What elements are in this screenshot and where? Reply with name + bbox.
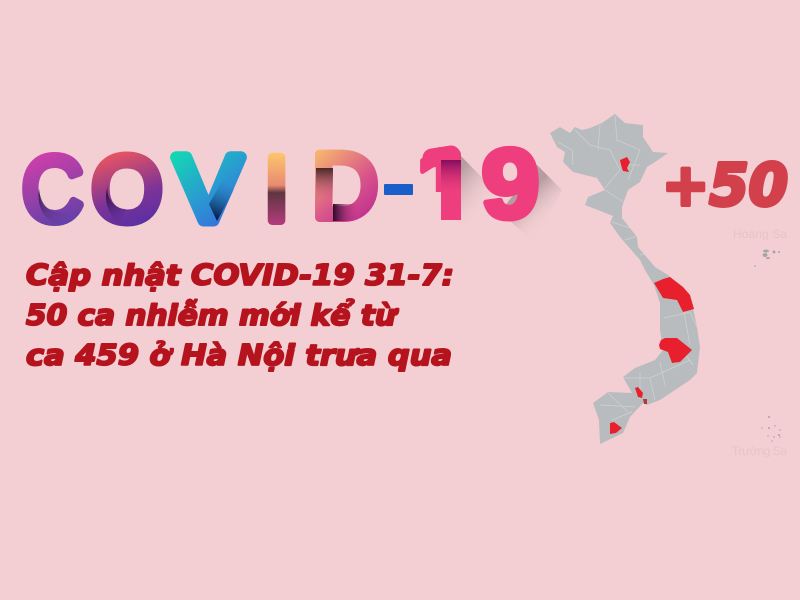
digit 1 [420,146,461,220]
long shadows behind 1 and 9 [448,156,562,243]
heading: update text [26,259,454,372]
map of Vietnam [550,114,700,444]
heading line 3: ca 459 ở Hà Nội trưa qua [26,339,452,372]
letter O: O [92,138,162,240]
letter V: V [176,138,241,240]
heading line 2: 50 ca nhiễm mới kể từ [26,298,399,332]
red province: Hanoi [620,157,630,172]
dash [384,184,413,195]
logo: COVID-19 [22,146,562,230]
letter I: I [264,138,289,240]
letter D: D [312,136,378,238]
red province: Long An coast [643,399,647,404]
number callout: +50: +50 [662,151,788,219]
icon: Hoang Sa islands [754,250,780,267]
red provinces: Da Nang and Quang Nam [654,277,694,312]
map landmass [550,114,700,444]
icon: Truong Sa islands [761,416,781,442]
digit 1: 1 [416,128,469,238]
label: Trường Sa: Trường Sa [732,444,787,458]
digit 9: 9 [482,128,540,238]
heading line 1: Cập nhật COVID-19 31-7: [26,259,454,292]
red province: Bac Lieu [610,422,622,434]
province borders [558,116,697,420]
red province: Ho Chi Minh area [635,387,643,398]
label: Hoàng Sa: Hoàng Sa [733,227,787,241]
infographic canvas [22,114,788,458]
red province: Dak Lak [659,338,692,363]
letter C: C [22,138,83,240]
